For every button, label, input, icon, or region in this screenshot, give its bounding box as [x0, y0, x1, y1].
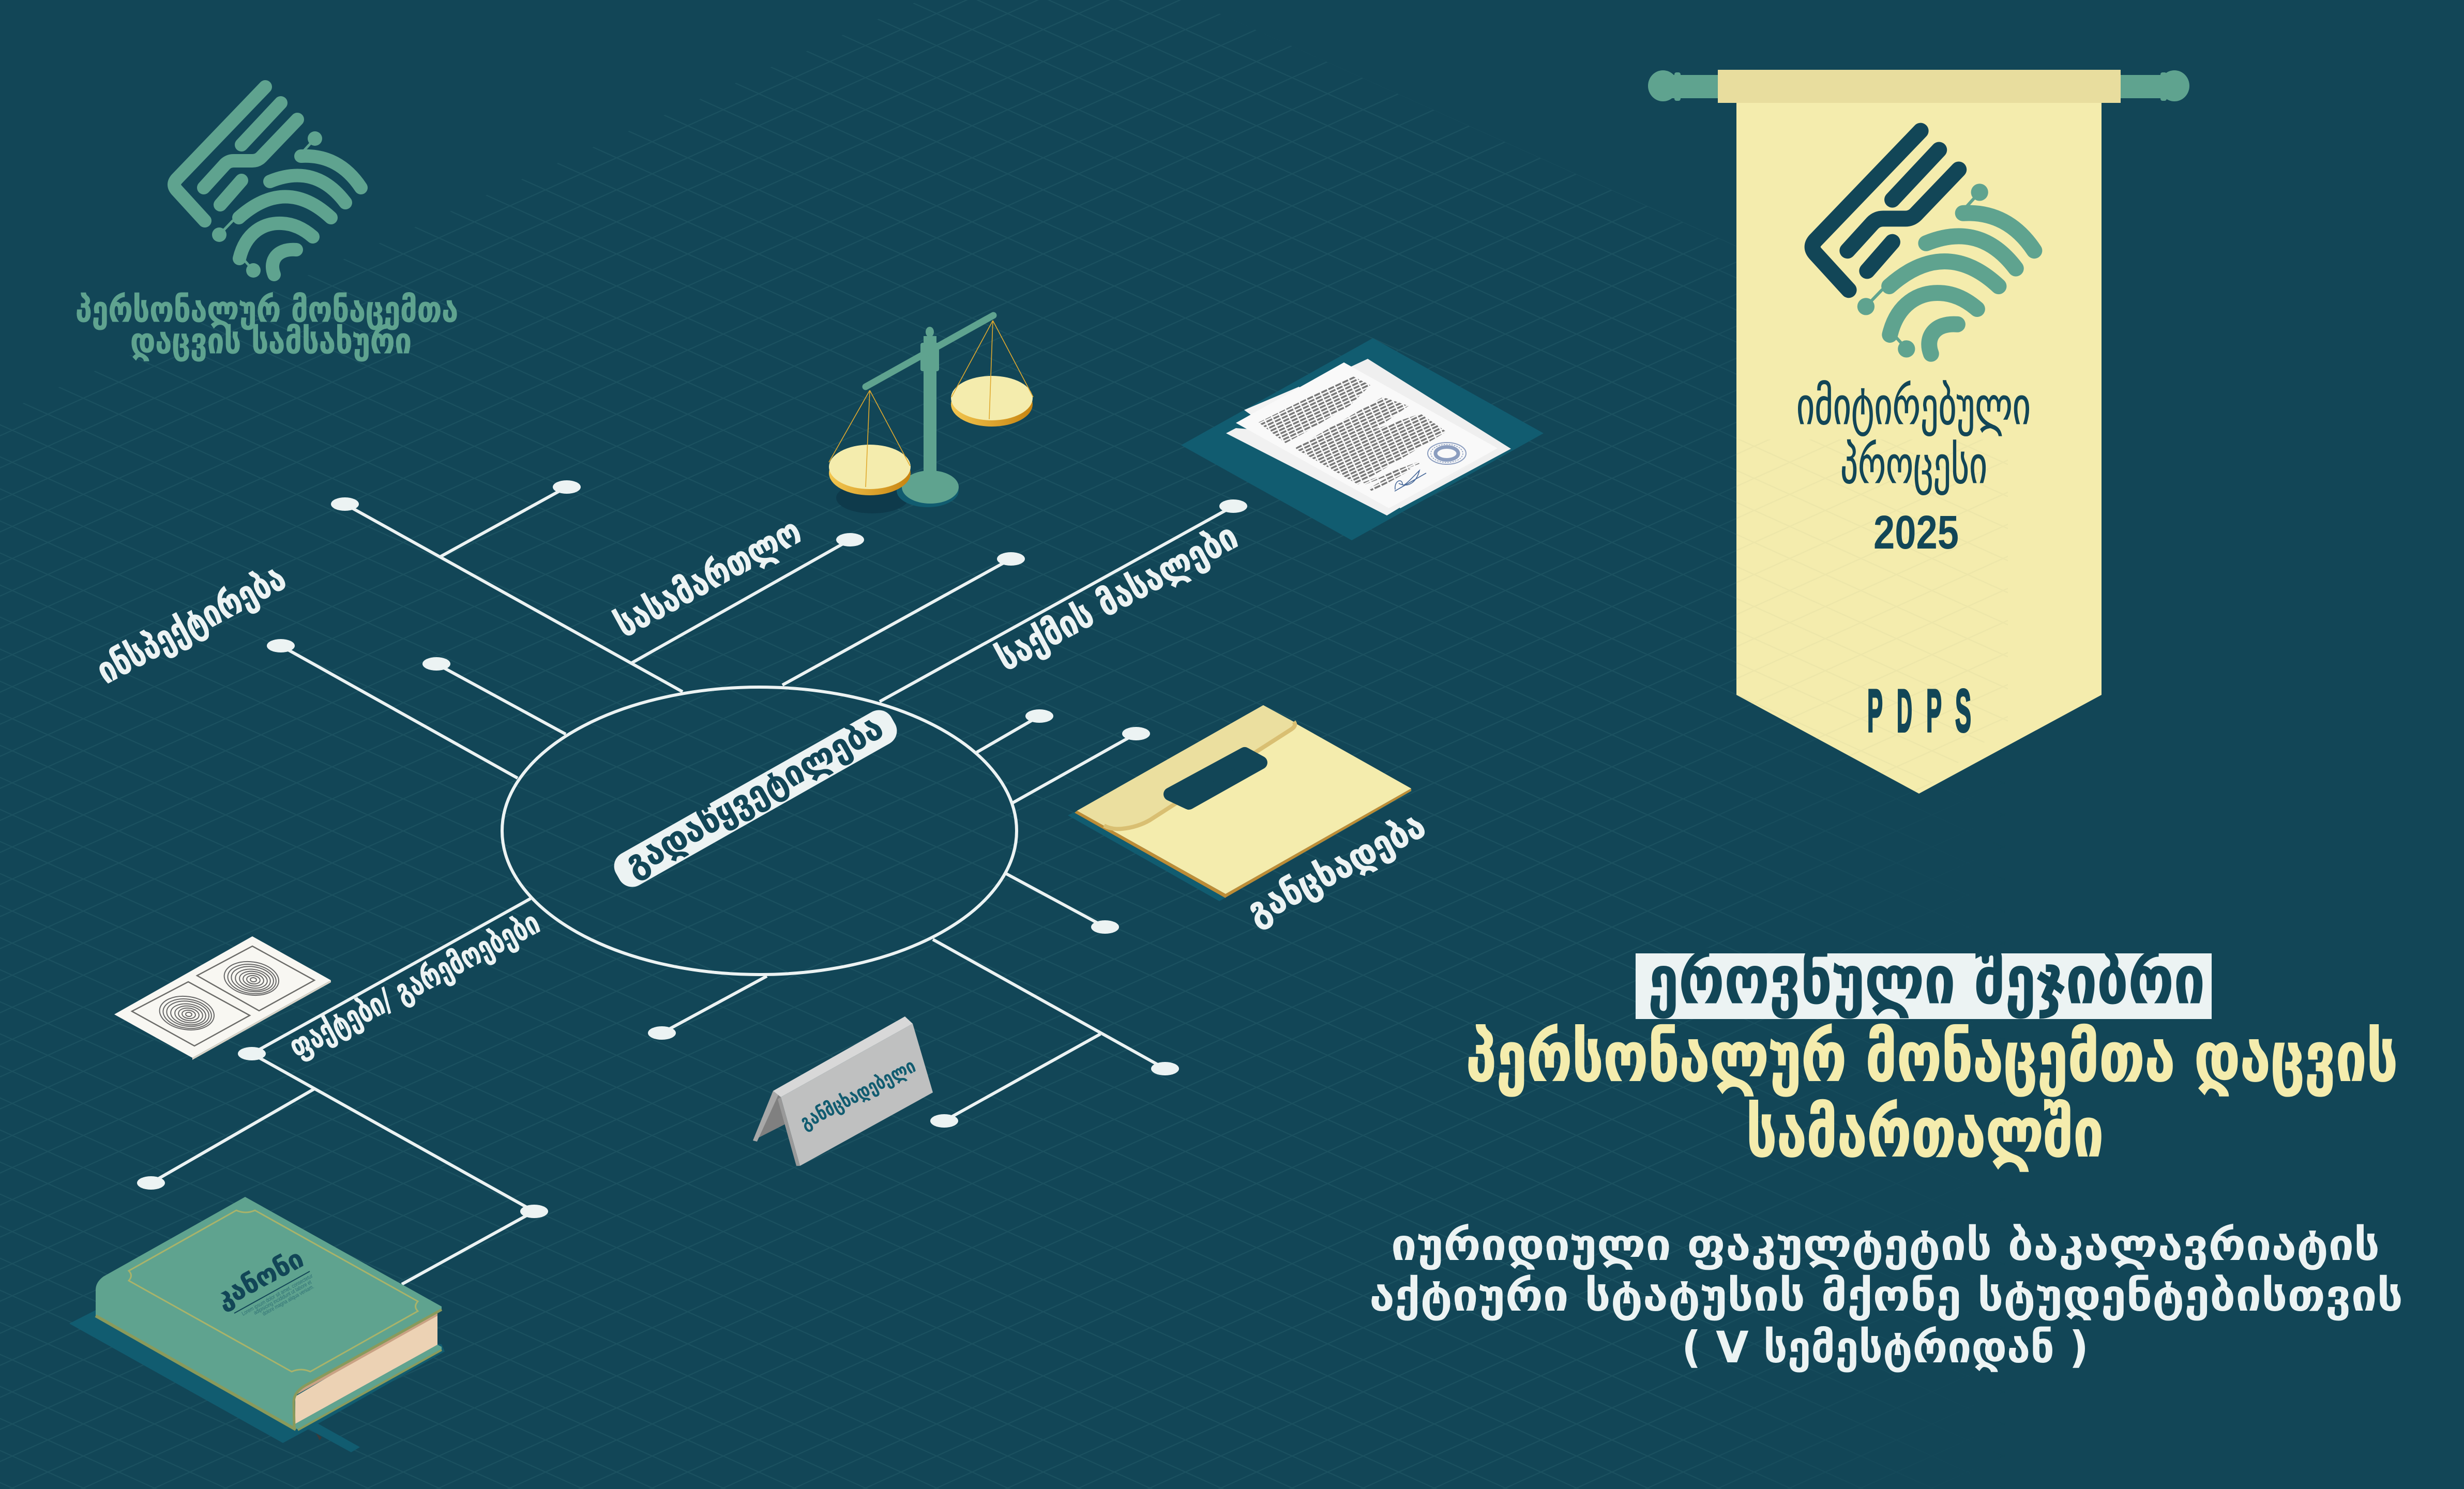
book small text: [241, 1273, 315, 1317]
banner cloth: [1736, 103, 2102, 794]
title: personal data protection law: სამართალში: [1746, 1093, 2104, 1173]
left pan: [829, 390, 911, 495]
book small text: adipisicing incididunt ut labore et: [253, 1279, 313, 1316]
book title: კანონი: [211, 1243, 308, 1314]
envelope flap: [1077, 705, 1295, 829]
subtitle: eligibility: [1369, 1220, 2403, 1373]
book small text: dolore magna aliqua veniam.: [262, 1284, 315, 1317]
logo text: [75, 290, 458, 362]
stamp: [1428, 443, 1466, 464]
label: case materials: საქმის მასალები: [989, 515, 1245, 679]
central ellipse: [502, 687, 1017, 975]
label: facts and circumstances: ფაქტები/ გარემოებები: [283, 903, 546, 1066]
banner heading: [1796, 376, 2031, 495]
logo text: დაცვის სამსახური: [130, 321, 412, 362]
title: personal data protection law: [1466, 1017, 2398, 1173]
pages: [295, 1312, 437, 1424]
banner: [1648, 70, 2189, 794]
central pill: decision: გადაწყვეტილება: [618, 707, 889, 884]
banner: S: [1955, 677, 1971, 744]
banner acronym: [1867, 677, 1971, 744]
fingerprint 1: [222, 958, 281, 999]
banner acronym: P: [1926, 677, 1942, 744]
cover and spine: [96, 1197, 442, 1428]
icon: application envelope: [1068, 705, 1412, 901]
logo: personal data protection service: [75, 87, 458, 362]
right pan: [951, 321, 1033, 427]
banner year: 2025: [1873, 506, 1959, 559]
book small text: Lorem ipsum dolor sit amet, consectetur: [241, 1273, 314, 1317]
banner acronym: P: [1867, 677, 1883, 744]
envelope window: [1170, 754, 1261, 803]
connector lines: [151, 487, 1233, 1284]
icon: applicant name sign: [753, 1016, 933, 1166]
icon: fingerprint card: [114, 936, 331, 1060]
icon: scales: [829, 315, 1033, 513]
label: court: სასამართლო: [608, 510, 808, 646]
banner logo: [1812, 131, 2034, 357]
icon: case documents: [1181, 338, 1544, 540]
label: application: განცხადება: [1239, 804, 1432, 933]
fingerprint 2: [157, 993, 216, 1034]
subtitle: eligibility: ( V სემესტრიდან ): [1682, 1322, 2089, 1373]
banner top bar: [1718, 70, 2121, 103]
icon: law book: [69, 1197, 445, 1452]
back cover: [295, 1345, 442, 1430]
title: national competition: ეროვნული შეჯიბრი: [1648, 942, 2205, 1019]
banner rod: [1648, 70, 2189, 101]
logo mark: [174, 87, 361, 278]
logo text: პერსონალურ მონაცემთა: [75, 290, 458, 330]
subtitle: eligibility: აქტიური სტატუსის მქონე სტუდენტებისთვის: [1369, 1270, 2403, 1321]
banner acronym: D: [1897, 677, 1912, 744]
banner heading: პროცესი: [1840, 435, 1987, 495]
connector nodes: [137, 480, 1247, 1218]
banner heading: იმიტირებული: [1796, 376, 2031, 436]
sign text: განმცხადებელი: [796, 1054, 919, 1134]
book shadow: [69, 1310, 445, 1443]
signature: [1395, 470, 1426, 491]
label: inspection: ინსპექტირება: [89, 556, 293, 692]
cover frame: [129, 1210, 418, 1372]
subtitle: eligibility: იურიდიული ფაკულტეტის ბაკალავრიატის: [1391, 1220, 2380, 1270]
